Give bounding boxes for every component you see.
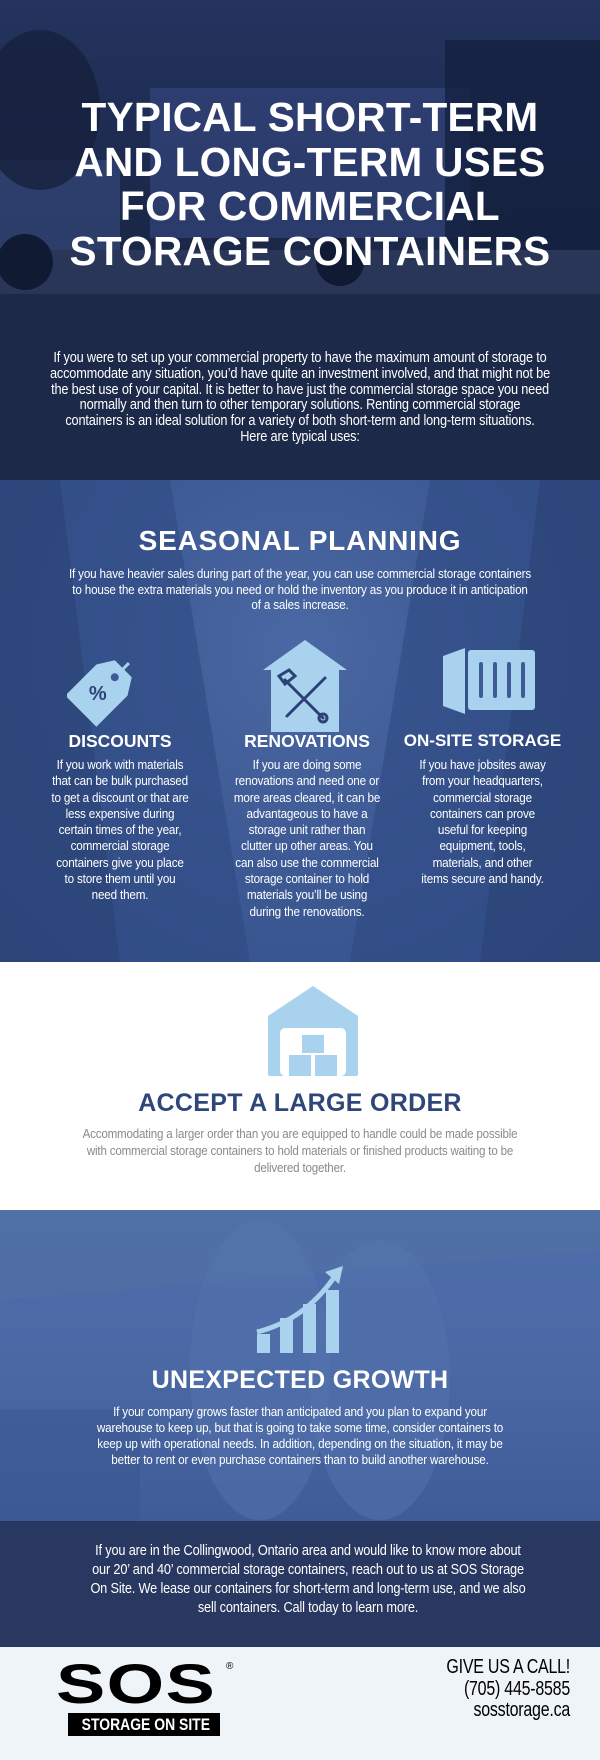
logo: SOS: [56, 1652, 216, 1715]
title: FOR COMMERCIAL: [120, 183, 500, 229]
heading: on-site storage: ON-SITE STORAGE: [404, 731, 561, 750]
discounts text: need them.: [92, 887, 148, 902]
renovations text: [234, 757, 380, 919]
title: TYPICAL SHORT-TERM: [82, 94, 538, 140]
heading: seasonal planning: SEASONAL PLANNING: [139, 525, 461, 556]
column: renovations: [234, 640, 380, 919]
on-site text: materials, and other: [433, 855, 532, 870]
discounts text: [51, 757, 189, 902]
discounts text: to get a discount or that are: [51, 790, 189, 805]
intro text: normally and then turn to other temporary solutions. Renting commercial storage: [80, 397, 520, 413]
icon: warehouse with boxes: [268, 986, 358, 1076]
intro text: [50, 350, 550, 445]
renovations text: storage container to hold: [245, 871, 369, 886]
discounts text: If you work with materials: [57, 757, 183, 772]
column: on-site storage: [404, 648, 561, 886]
renovations text: during the renovations.: [250, 904, 364, 919]
title: STORAGE CONTAINERS: [70, 228, 550, 274]
intro text: If you were to set up your commercial property to have the maximum amount of storage to: [53, 350, 547, 366]
column: discounts: [51, 660, 189, 902]
cta text: If you are in the Collingwood, Ontario area and would like to know more about: [95, 1542, 521, 1559]
logo: ®: [226, 1661, 233, 1672]
intro text: Here are typical uses:: [240, 429, 360, 445]
title: [70, 94, 550, 274]
growth text: better to rent or even purchase containers than to build another warehouse.: [111, 1452, 489, 1467]
intro text: the best use of your capital. It is better to have just the commercial storage space you need: [51, 382, 549, 398]
discounts text: that can be bulk purchased: [52, 773, 188, 788]
icon: growth chart: [256, 1266, 343, 1353]
contact info: [446, 1656, 570, 1721]
icon: shipping container: [443, 648, 535, 714]
cta text: sell containers. Call today to learn more.: [198, 1599, 418, 1616]
heading: accept a large order: ACCEPT A LARGE ORDER: [138, 1089, 462, 1117]
growth text: warehouse to keep up, but that is going to take some time, consider containers to: [97, 1420, 503, 1435]
growth text: keep up with operational needs. In addition, depending on the situation, it may be: [97, 1436, 503, 1451]
renovations text: storage unit rather than: [249, 822, 365, 837]
on-site text: from your headquarters,: [422, 773, 543, 788]
growth text: If your company grows faster than anticipated and you plan to expand your: [113, 1404, 487, 1419]
discounts text: certain times of the year,: [59, 822, 181, 837]
on-site text: commercial storage: [433, 790, 532, 805]
discounts text: to store them until you: [65, 871, 175, 886]
discounts text: containers give you place: [56, 855, 184, 870]
logo: STORAGE ON SITE: [82, 1715, 210, 1734]
intro text: accommodate any situation, you’d have quite an investment involved, and that might not be: [50, 366, 550, 382]
seasonal text: If you have heavier sales during part of the year, you can use commercial storage containers: [69, 566, 531, 581]
renovations text: If you are doing some: [253, 757, 361, 772]
renovations text: clutter up other areas. You: [241, 838, 373, 853]
renovations text: advantageous to have a: [247, 806, 367, 821]
on-site text: equipment, tools,: [439, 838, 526, 853]
icon: price tag: %: [89, 683, 107, 705]
cta text: [90, 1542, 526, 1616]
hero background photo shapes: [0, 30, 600, 294]
seasonal text: to house the extra materials you need or hold the inventory as you produce it in anticipation: [72, 582, 528, 596]
renovations text: can also use the commercial: [235, 855, 379, 870]
contact info: GIVE US A CALL!: [446, 1656, 570, 1678]
renovations text: renovations and need one or: [235, 773, 379, 788]
discounts text: commercial storage: [71, 838, 169, 853]
footer: [0, 1647, 600, 1760]
title: AND LONG-TERM USES: [74, 138, 546, 184]
panel: accept a large order: [0, 962, 600, 1210]
renovations text: materials you’ll be using: [247, 887, 367, 902]
panel: unexpected growth: [0, 1210, 600, 1521]
seasonal text: of a sales increase.: [251, 597, 349, 612]
renovations text: more areas cleared, it can be: [234, 790, 380, 805]
panel: seasonal planning: [0, 480, 600, 962]
large order text: with commercial storage containers to hold materials or finished products waiting to be: [87, 1143, 513, 1158]
on-site text: containers can prove: [430, 806, 535, 821]
large order text: [82, 1126, 517, 1175]
on-site text: If you have jobsites away: [419, 757, 546, 772]
contact info: (705) 445-8585: [464, 1678, 570, 1700]
heading: discounts: DISCOUNTS: [68, 731, 172, 751]
contact info: sosstorage.ca: [474, 1699, 570, 1721]
growth background: [0, 1340, 442, 1520]
growth text: [96, 1404, 503, 1467]
warehouse background: [0, 480, 600, 962]
logo: [56, 1652, 234, 1736]
discounts text: less expensive during: [66, 806, 174, 821]
icon: price tag: [67, 660, 132, 727]
heading: renovations: RENOVATIONS: [244, 731, 370, 751]
cta text: On Site. We lease our containers for short-term and long-term use, and we also: [90, 1580, 526, 1597]
seasonal text: [69, 566, 531, 612]
on-site text: [419, 757, 546, 886]
large order text: delivered together.: [254, 1160, 346, 1175]
panel: call to action: [0, 1521, 600, 1647]
on-site text: useful for keeping: [438, 822, 527, 837]
intro section: [0, 294, 600, 480]
icon: house with tools: [263, 640, 347, 732]
cta text: our 20’ and 40’ commercial storage containers, reach out to us at SOS Storage: [92, 1561, 524, 1578]
hero section: [0, 0, 600, 294]
intro text: containers is an ideal solution for a variety of both short-term and long-term situations.: [65, 413, 535, 429]
on-site text: items secure and handy.: [421, 871, 544, 886]
large order text: Accommodating a larger order than you are equipped to handle could be made possible: [83, 1126, 517, 1141]
heading: unexpected growth: UNEXPECTED GROWTH: [152, 1366, 448, 1394]
